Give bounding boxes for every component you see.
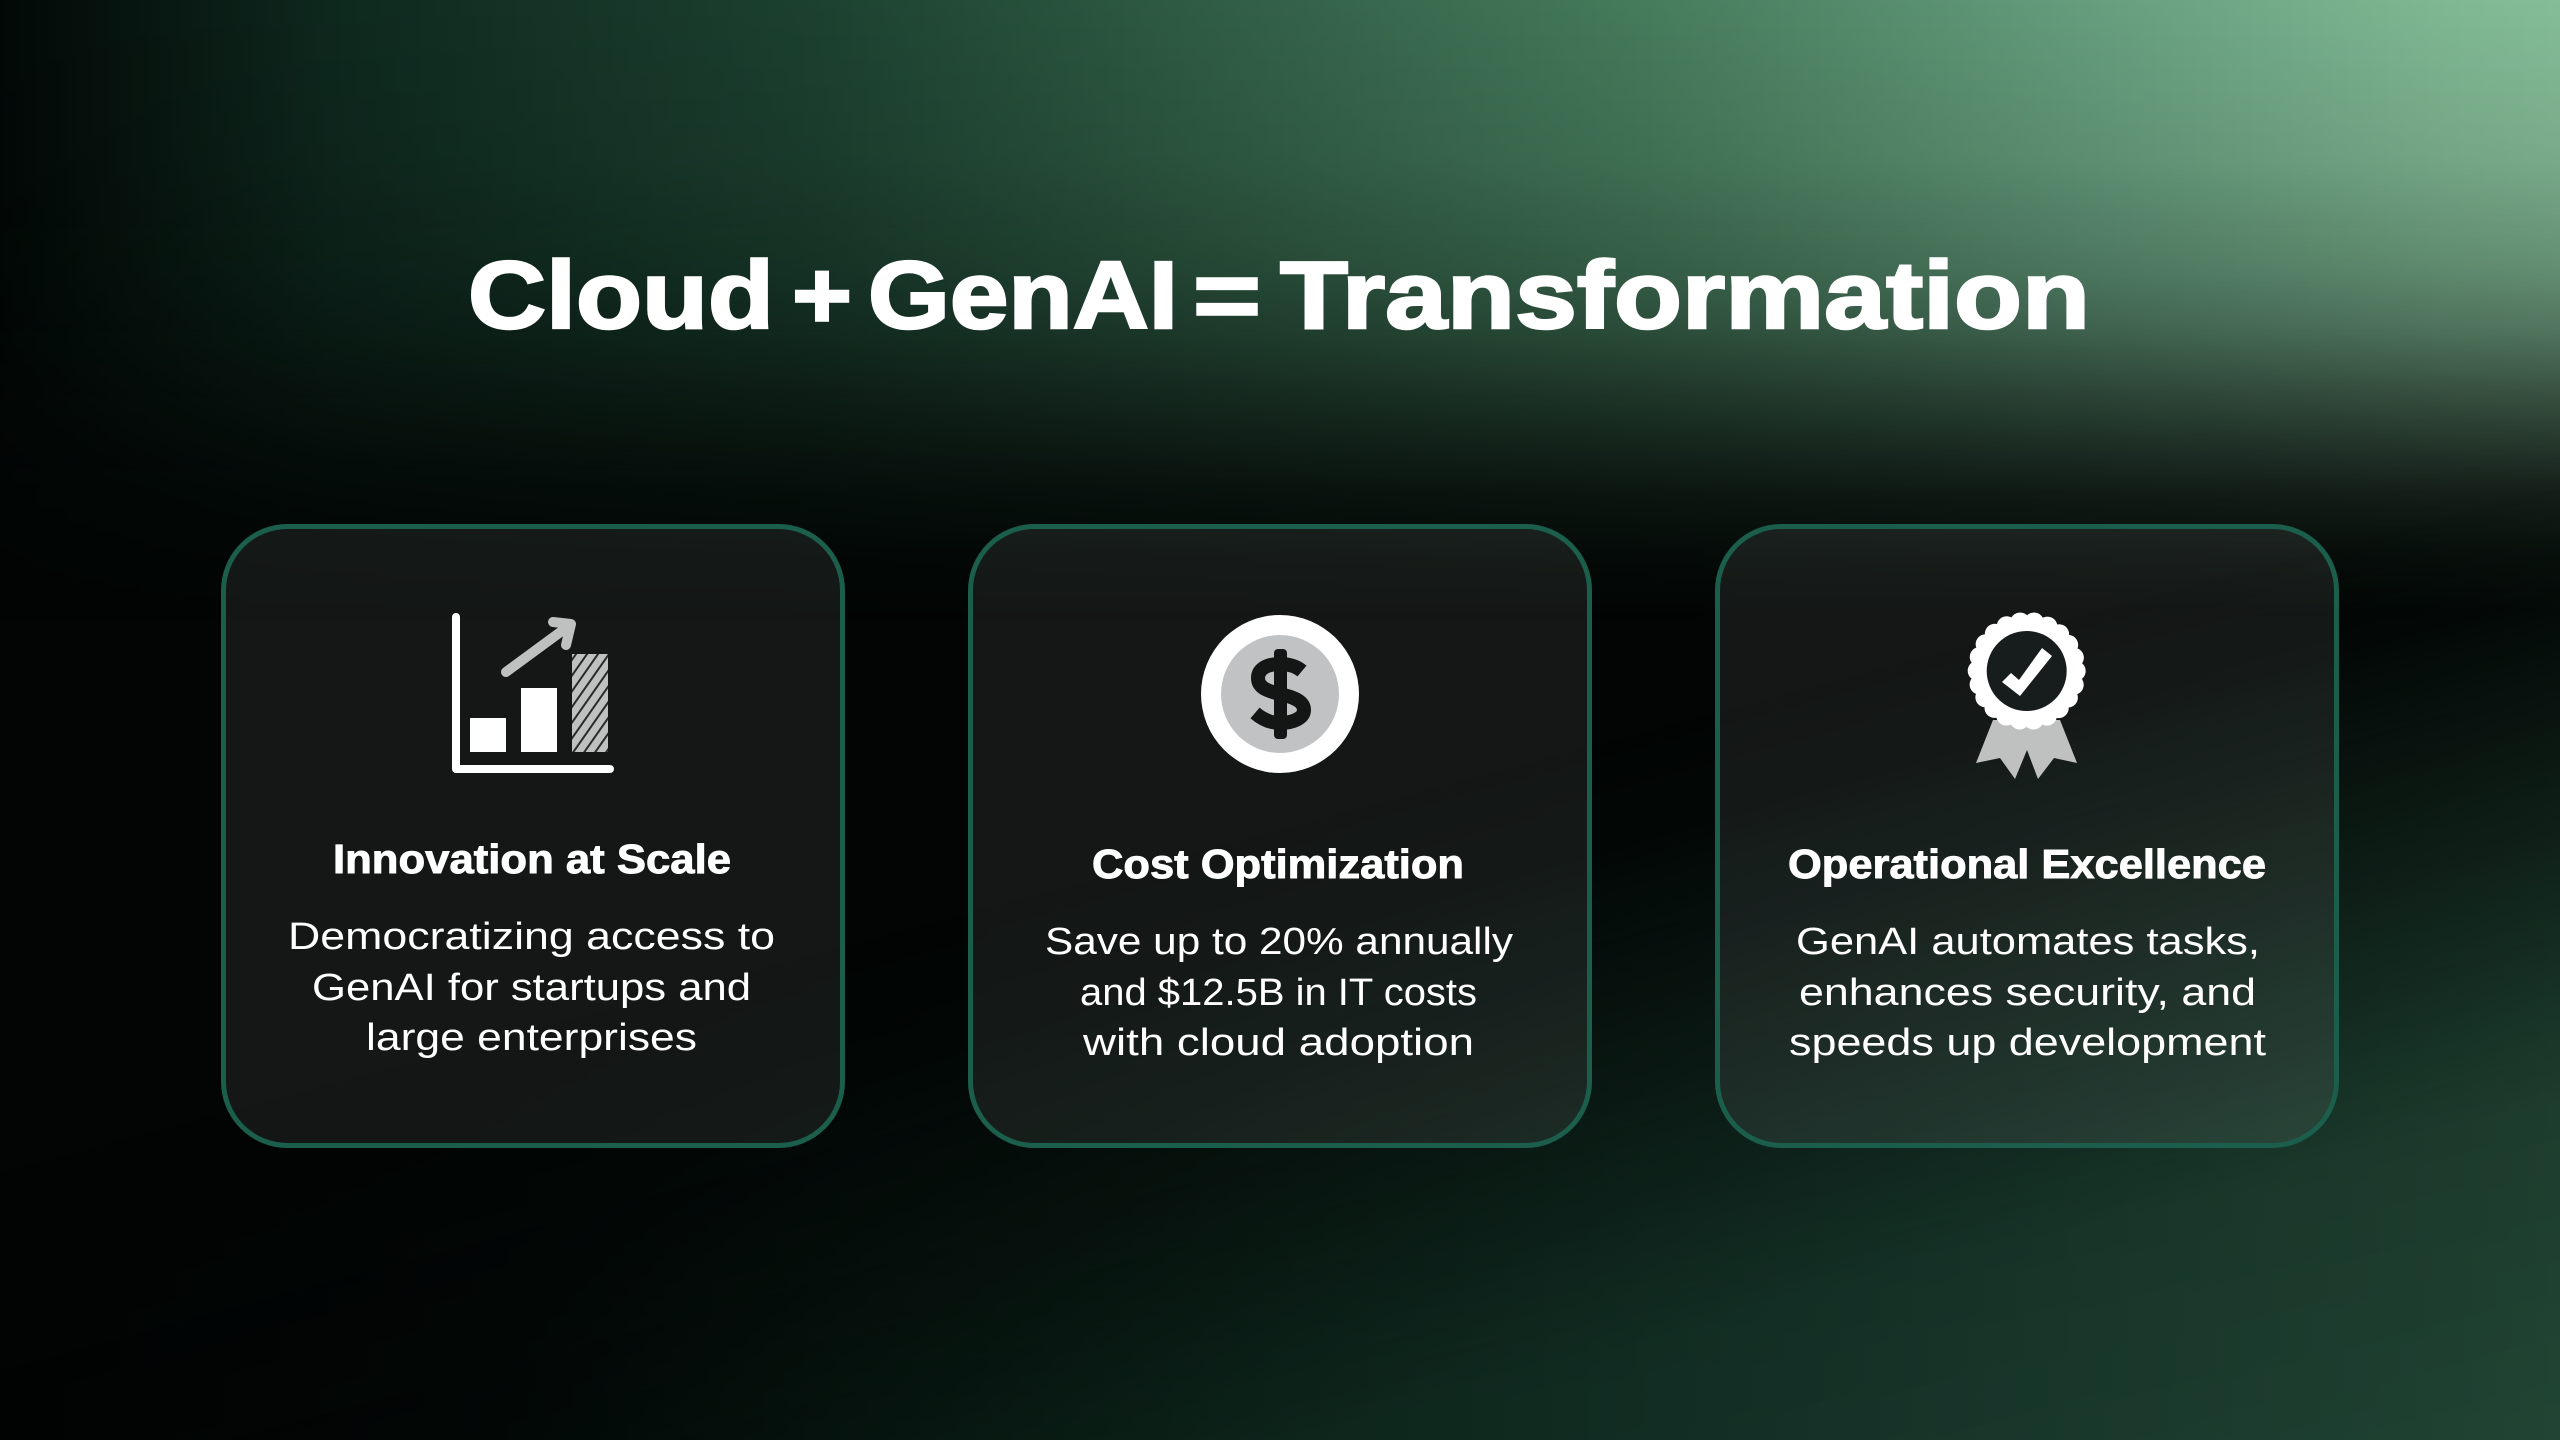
heading: Operational Excellence <box>1788 841 2266 887</box>
description <box>1045 921 1513 1064</box>
description: GenAI automates tasks, <box>1796 921 2260 963</box>
panel: cost optimization <box>970 526 1590 1146</box>
card background <box>970 526 1590 1146</box>
title <box>468 242 2090 349</box>
description: Democratizing access to <box>288 916 775 958</box>
description: with cloud adoption <box>1082 1022 1474 1064</box>
description: large enterprises <box>366 1017 697 1059</box>
title: GenAI <box>868 242 1178 349</box>
description: GenAI for startups and <box>312 967 751 1009</box>
icon: award rosette <box>1975 619 2079 779</box>
card background <box>224 526 842 1146</box>
description: speeds up development <box>1789 1022 2267 1064</box>
panel: operational excellence <box>1718 526 2336 1146</box>
heading: Innovation at Scale <box>333 836 731 882</box>
icon: bar chart with arrow <box>456 617 610 769</box>
description: and $12.5B in IT costs <box>1080 972 1477 1014</box>
icon: dollar coin <box>1201 615 1359 773</box>
title: + <box>792 242 852 349</box>
card background <box>1718 526 2336 1146</box>
title: = <box>1193 242 1261 349</box>
description <box>1789 921 2267 1064</box>
title: Cloud <box>468 242 774 349</box>
description: enhances security, and <box>1799 972 2256 1014</box>
description: Save up to 20% annually <box>1045 921 1513 963</box>
panel: innovation at scale <box>224 526 842 1146</box>
description <box>288 916 775 1059</box>
title: Transformation <box>1280 242 2090 349</box>
heading: Cost Optimization <box>1092 841 1464 887</box>
